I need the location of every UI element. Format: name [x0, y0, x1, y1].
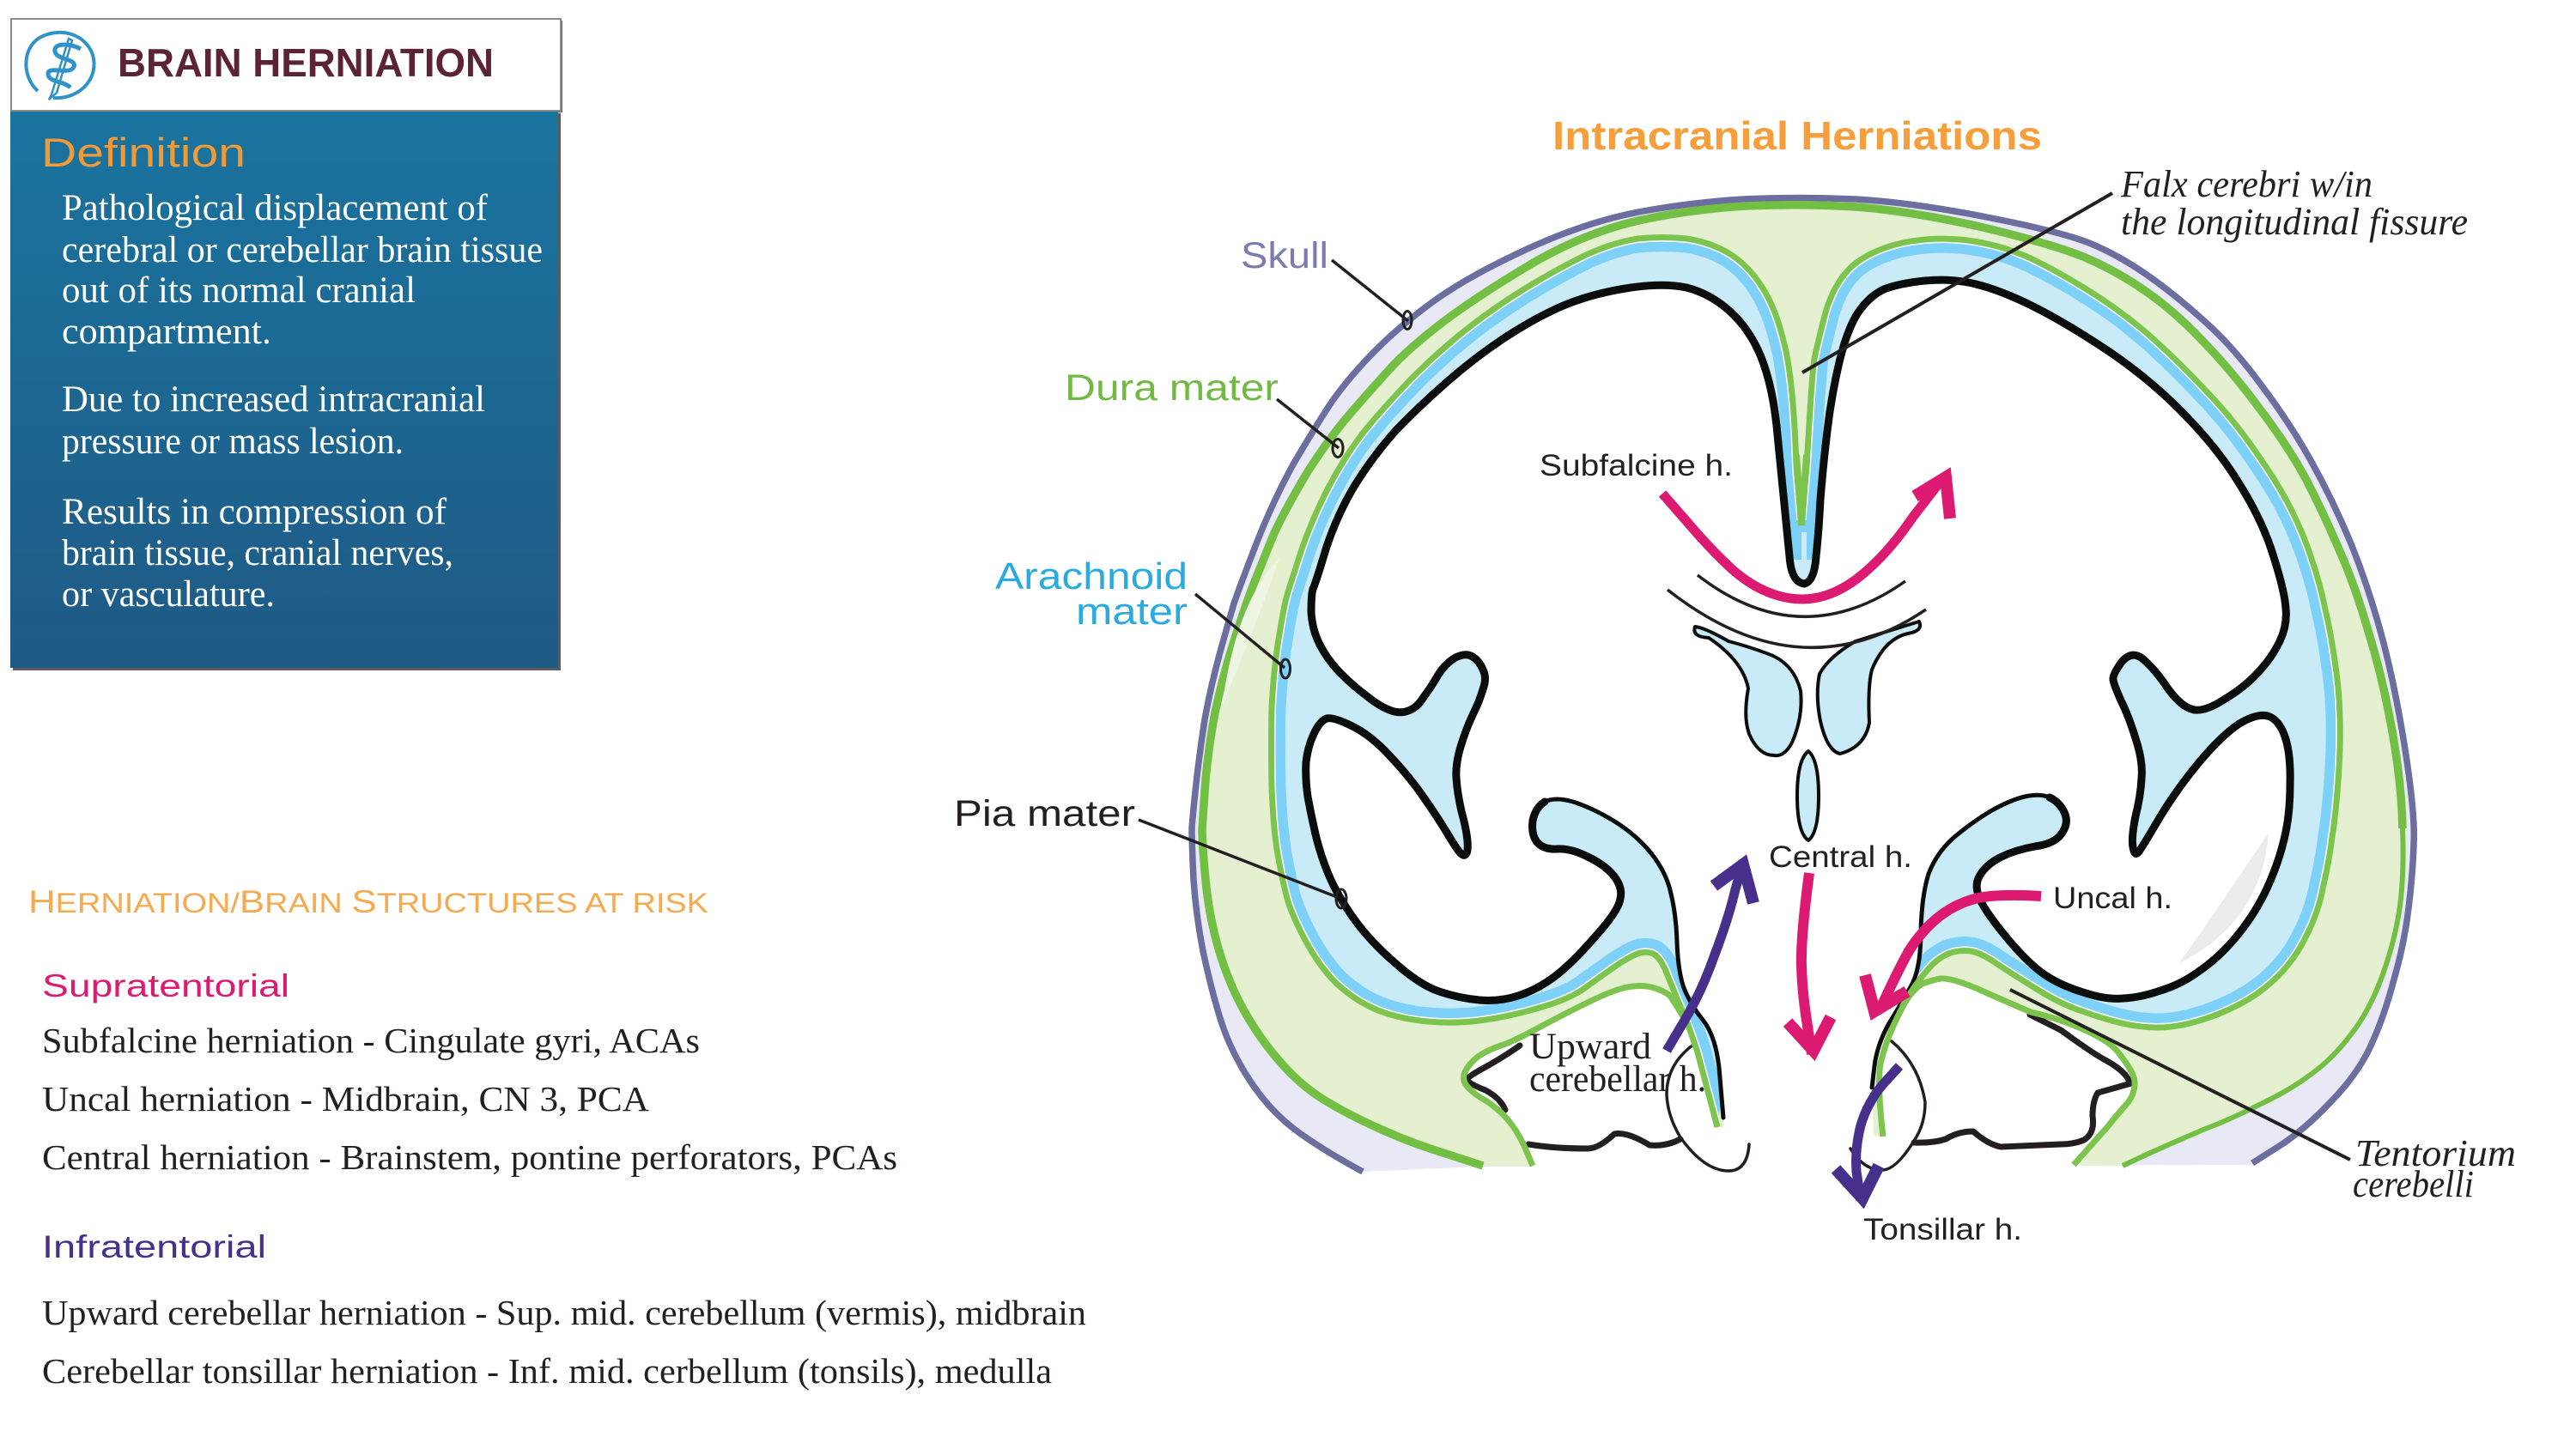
- leader: arachnoid mater: [1195, 594, 1290, 678]
- ventricles: [1694, 621, 1920, 840]
- list items: supratentorial: Uncal herniation - Midbrain, CN 3, PCA: [42, 1079, 649, 1119]
- label: falx cerebri: the longitudinal fissure: [2121, 201, 2468, 243]
- pia mater outlines: [1306, 280, 2290, 1118]
- icon: rod of asclepius logo: [26, 33, 94, 100]
- arrow: upward cerebellar herniation: [1667, 864, 1753, 1051]
- dura mater and falx fill: [1202, 205, 2403, 1166]
- leader: tentorium cerebelli: [2010, 990, 2350, 1160]
- label: upward cerebellar herniation: Upward: [1529, 1027, 1651, 1067]
- text block: definition body: or vasculature.: [62, 574, 275, 615]
- label: falx cerebri: Falx cerebri w/in: [2120, 163, 2372, 205]
- text block: definition body: out of its normal cranial: [62, 270, 416, 311]
- list items: supratentorial: [42, 1021, 897, 1177]
- label: tentorium cerebelli: Tentorium: [2355, 1132, 2516, 1174]
- text block: definition body: cerebral or cerebellar brain tissue: [62, 230, 543, 270]
- panel: title header: [11, 19, 562, 112]
- arrow: subfalcine herniation: [1662, 477, 1950, 599]
- heading: intracranial herniations: Intracranial Herniations: [1552, 113, 2042, 158]
- label: uncal herniation: Uncal h.: [2053, 882, 2172, 915]
- label: pia mater: Pia mater: [954, 793, 1135, 834]
- list items: infratentorial: Cerebellar tonsillar herniation - Inf. mid. cerbellum (tonsils), medulla: [42, 1351, 1052, 1391]
- list items: supratentorial: Central herniation - Brainstem, pontine perforators, PCAs: [42, 1137, 897, 1177]
- brain tissue: [1306, 280, 2290, 1173]
- label: subfalcine herniation: Subfalcine h.: [1540, 449, 1733, 482]
- label: arachnoid mater: [995, 555, 1188, 633]
- text block: definition body: Due to increased intracranial: [62, 379, 485, 420]
- subheading: supratentorial: Supratentorial: [42, 968, 289, 1003]
- label: upward cerebellar herniation: cerebellar h.: [1529, 1059, 1706, 1100]
- list items: infratentorial: [42, 1293, 1086, 1391]
- label: dura mater: Dura mater: [1065, 367, 1279, 409]
- arachnoid space left: [1271, 237, 1801, 1127]
- text block: definition body: [62, 188, 543, 615]
- falx tip fluid: [1782, 520, 1826, 588]
- label: central herniation: Central h.: [1769, 840, 1912, 874]
- heading: brain herniation: BRAIN HERNIATION: [118, 40, 494, 85]
- leader: dura mater: [1277, 399, 1343, 457]
- subheading: infratentorial: Infratentorial: [42, 1229, 266, 1264]
- skull layer: [1192, 197, 2414, 1172]
- arachnoid space right: [1801, 239, 2340, 1137]
- text block: definition body: pressure or mass lesion.: [62, 421, 404, 462]
- temporal lobe highlight: [2179, 833, 2269, 963]
- leader: skull: [1332, 260, 1412, 330]
- leader: falx cerebri: [1802, 193, 2112, 373]
- heading: structures at risk: HERNIATION/ BRAIN STRUCTURES AT RISK: [28, 884, 708, 919]
- text block: definition body: brain tissue, cranial nerves,: [62, 533, 453, 573]
- text block: infratentorial list: [42, 1229, 1086, 1391]
- list items: infratentorial: Upward cerebellar herniation - Sup. mid. cerebellum (vermis), midbrain: [42, 1293, 1086, 1332]
- label: tonsillar herniation: Tonsillar h.: [1863, 1213, 2022, 1246]
- corpus callosum arcs: [1668, 575, 1926, 647]
- panel: definition: [10, 112, 561, 670]
- leader: pia mater: [1139, 820, 1346, 908]
- label: arachnoid mater: mater: [1076, 591, 1188, 633]
- text block: definition body: Pathological displacement of: [62, 188, 489, 228]
- label: tentorium cerebelli: cerebelli: [2353, 1163, 2474, 1205]
- label: falx cerebri: [2120, 163, 2468, 243]
- label: arachnoid mater: Arachnoid: [995, 555, 1188, 597]
- text block: definition body: Results in compression of: [62, 492, 447, 532]
- list items: supratentorial: Subfalcine herniation - Cingulate gyri, ACAs: [42, 1021, 700, 1060]
- label: skull: Skull: [1241, 235, 1328, 276]
- diagram: coronal section of the head: [1192, 197, 2414, 1173]
- label: upward cerebellar herniation: [1529, 1027, 1706, 1100]
- arrow: central herniation: [1788, 873, 1831, 1054]
- text block: definition body: compartment.: [62, 312, 271, 352]
- arrow: uncal herniation: [1865, 895, 2041, 1011]
- label: tentorium cerebelli: [2353, 1132, 2516, 1205]
- text block: supratentorial list: [42, 968, 897, 1177]
- heading: definition: Definition: [41, 130, 246, 175]
- cerebellum outlines: [1467, 1015, 2131, 1171]
- inner dura and tentorium lines: [1271, 237, 2340, 1166]
- arrow: tonsillar herniation: [1836, 1066, 1899, 1200]
